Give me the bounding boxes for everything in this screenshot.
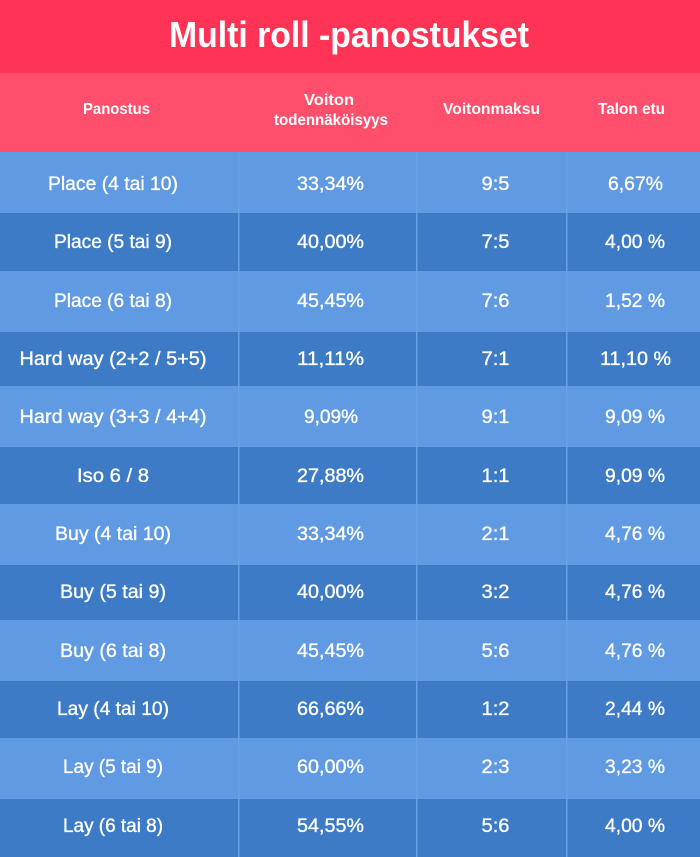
row: Buy (4 tai 10): 33,34% [297, 524, 364, 545]
row: Buy (5 tai 9): 4,76 % [605, 582, 665, 603]
row: Lay (4 tai 10): 66,66% [297, 699, 364, 720]
row: Buy (5 tai 9): 40,00% [297, 582, 364, 603]
row: Place (5 tai 9) [54, 232, 665, 253]
row: Hard way (3+3 / 4+4): 9,09 % [605, 407, 665, 428]
row: Place (6 tai 8): Place (6 tai 8) [54, 291, 172, 312]
row: Place (4 tai 10): 6,67% [608, 174, 663, 195]
row: Buy (4 tai 10) [55, 524, 665, 545]
row: Buy (6 tai 8) [60, 641, 665, 662]
row: Place (4 tai 10): Place (4 tai 10) [48, 174, 178, 195]
row: Place (5 tai 9): 7:5 [482, 232, 510, 253]
row: Hard way (2+2 / 5+5): 11,10 % [600, 349, 671, 370]
row: Lay (6 tai 8): 4,00 % [605, 816, 665, 837]
row: Buy (5 tai 9): Buy (5 tai 9) [60, 582, 166, 603]
row: Iso 6 / 8: 1:1 [482, 466, 510, 487]
row: Lay (4 tai 10): 2,44 % [605, 699, 665, 720]
row: Hard way (2+2 / 5+5) [20, 349, 671, 370]
row: Iso 6 / 8: Iso 6 / 8 [77, 466, 149, 487]
row: Place (4 tai 10) [48, 174, 663, 195]
table header row [0, 73, 700, 152]
row: Hard way (3+3 / 4+4): 9,09% [304, 407, 358, 428]
row: Place (4 tai 10): 33,34% [297, 174, 364, 195]
row: Lay (5 tai 9): 2:3 [482, 757, 510, 778]
row: Lay (6 tai 8): Lay (6 tai 8) [63, 816, 163, 837]
row: Hard way (3+3 / 4+4): 9:1 [482, 407, 510, 428]
row: Place (6 tai 8) [54, 291, 665, 312]
row: Buy (6 tai 8): 5:6 [482, 641, 510, 662]
row: Lay (4 tai 10): 1:2 [482, 699, 510, 720]
row: Place (5 tai 9): 4,00 % [605, 232, 665, 253]
row: Place (6 tai 8): 45,45% [297, 291, 364, 312]
table header row: Panostus [83, 101, 150, 118]
row: Buy (4 tai 10): 4,76 % [605, 524, 665, 545]
row: Lay (5 tai 9) [63, 757, 665, 778]
row: Buy (4 tai 10): Buy (4 tai 10) [55, 524, 171, 545]
row: Buy (6 tai 8): 4,76 % [605, 641, 665, 662]
row: Iso 6 / 8: 27,88% [297, 466, 364, 487]
row: Buy (4 tai 10): 2:1 [482, 524, 510, 545]
row: Buy (5 tai 9) [60, 582, 665, 603]
row: Lay (6 tai 8): 5:6 [482, 816, 510, 837]
row: Hard way (3+3 / 4+4) [20, 407, 665, 428]
table header row: todennäköisyys [274, 112, 388, 129]
table header row: Voitonmaksu [443, 101, 540, 118]
row: Iso 6 / 8 [77, 466, 665, 487]
row: Lay (4 tai 10) [57, 699, 665, 720]
row: Hard way (3+3 / 4+4): Hard way (3+3 / 4+4) [20, 407, 206, 428]
row: Buy (5 tai 9): 3:2 [482, 582, 510, 603]
row: Lay (6 tai 8) [63, 816, 665, 837]
row: Lay (5 tai 9): 3,23 % [605, 757, 665, 778]
table header row: Talon etu [598, 101, 665, 118]
row: Buy (6 tai 8): Buy (6 tai 8) [60, 641, 166, 662]
row: Place (6 tai 8): 7:6 [482, 291, 510, 312]
row: Place (5 tai 9): 40,00% [297, 232, 364, 253]
row: Lay (5 tai 9): 60,00% [297, 757, 364, 778]
row: Place (5 tai 9): Place (5 tai 9) [54, 232, 172, 253]
row: Lay (4 tai 10): Lay (4 tai 10) [57, 699, 169, 720]
row: Place (6 tai 8): 1,52 % [605, 291, 665, 312]
row: Hard way (2+2 / 5+5): 11,11% [297, 349, 364, 370]
row: Hard way (2+2 / 5+5): Hard way (2+2 / 5+5) [20, 349, 206, 370]
row: Lay (5 tai 9): Lay (5 tai 9) [63, 757, 163, 778]
table header row: Voiton [304, 92, 354, 109]
row: Buy (6 tai 8): 45,45% [297, 641, 364, 662]
row: Lay (6 tai 8): 54,55% [297, 816, 364, 837]
title banner: Multi roll -panostukset [169, 14, 529, 55]
row: Iso 6 / 8: 9,09 % [605, 466, 665, 487]
row: Hard way (2+2 / 5+5): 7:1 [482, 349, 510, 370]
title banner [0, 0, 700, 73]
row: Place (4 tai 10): 9:5 [482, 174, 510, 195]
